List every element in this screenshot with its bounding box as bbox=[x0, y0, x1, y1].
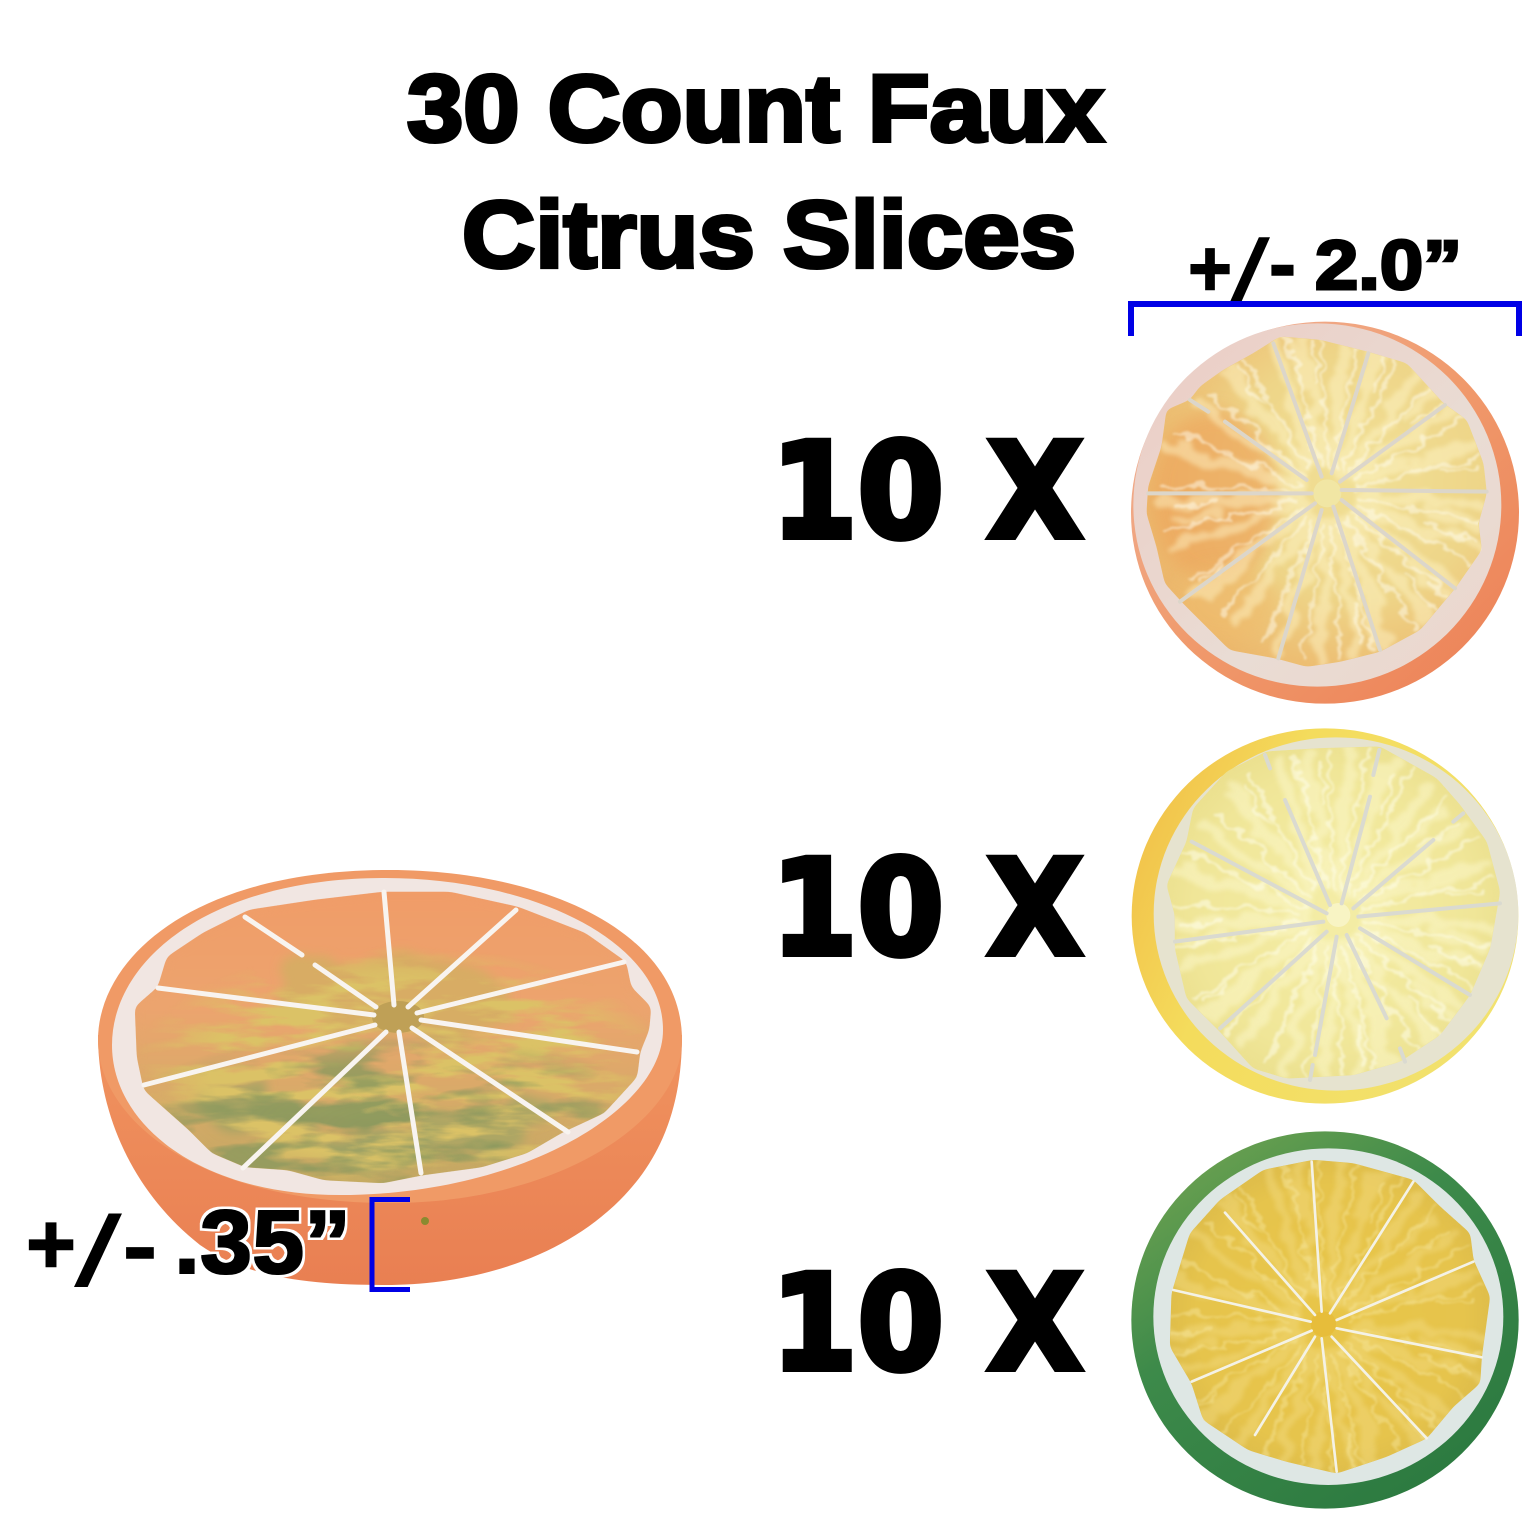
thickness label bbox=[26, 1193, 351, 1308]
pith ring bbox=[112, 878, 663, 1195]
thickness label: .35” bbox=[174, 1193, 351, 1293]
thickness label: / bbox=[74, 1196, 122, 1308]
thickness bracket bbox=[372, 1200, 410, 1290]
puck top rim bbox=[98, 870, 682, 1203]
title: Citrus Slices bbox=[462, 182, 1076, 288]
diameter label: / bbox=[1230, 221, 1271, 320]
puck seed mark bbox=[421, 1217, 429, 1225]
thickness label: - bbox=[123, 1199, 157, 1294]
lime slice, top view bbox=[1131, 1131, 1519, 1509]
diameter label: - bbox=[1269, 219, 1296, 308]
diameter label: + bbox=[1188, 224, 1232, 313]
puck segment lines bbox=[144, 892, 637, 1173]
diameter label: 2.0” bbox=[1315, 226, 1462, 304]
orange slice, top view bbox=[1131, 310, 1519, 704]
puck flesh bbox=[135, 892, 651, 1183]
flesh marbling bbox=[159, 948, 637, 1183]
title: 30 Count Faux bbox=[407, 56, 1104, 162]
lemon slice, top view bbox=[1132, 728, 1519, 1104]
title bbox=[407, 56, 1104, 288]
orange slice, angled view bbox=[98, 870, 700, 1285]
puck side wall bbox=[98, 1035, 682, 1285]
puck hub bbox=[372, 1001, 424, 1033]
diameter label bbox=[1188, 219, 1462, 320]
quantity: lemon slices: 10 X bbox=[771, 832, 1083, 986]
quantity: lime slices: 10 X bbox=[771, 1247, 1083, 1401]
thickness label: + bbox=[26, 1197, 76, 1292]
diameter bracket bbox=[1131, 304, 1519, 336]
quantity: orange slices: 10 X bbox=[771, 415, 1083, 569]
